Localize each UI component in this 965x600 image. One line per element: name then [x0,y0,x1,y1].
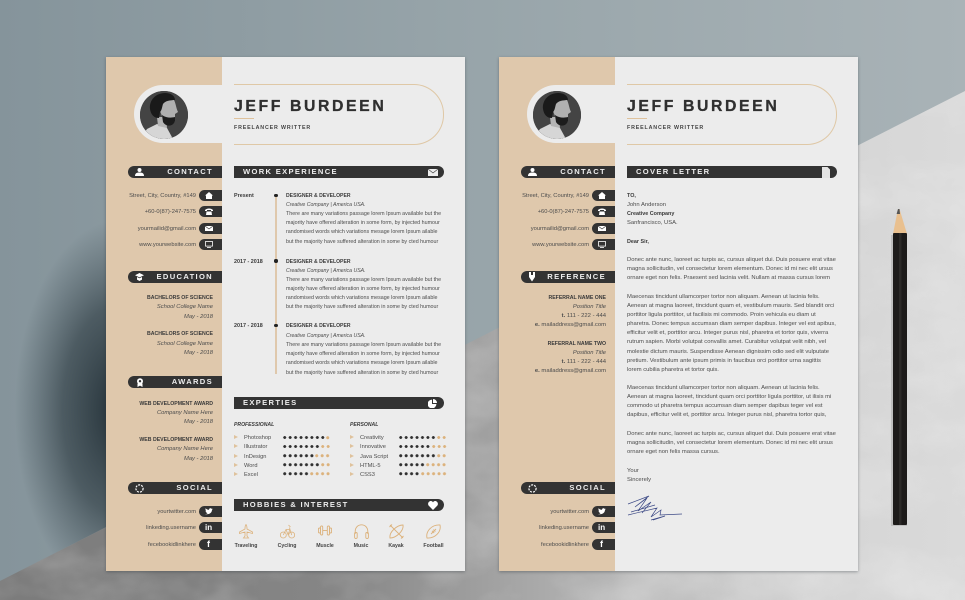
professional skills: InDesign [244,454,266,460]
section: social: yourtwitter.com [157,509,196,515]
heading: social: SOCIAL [569,483,606,492]
section: reference: Position Title [573,304,606,310]
job entry 3: majority have offered alteration in some form, by injected humour [286,351,440,357]
heading: awards: AWARDS [172,377,213,386]
icon: football [426,524,441,538]
portrait photo [140,91,188,139]
letter body text [627,193,836,483]
resume page: Jeff Burdeen [106,57,465,571]
label: kayak: Kayak [388,543,404,549]
letter body text: molestie dictum mauris. Suspendisse Aenean dignissim odio sed elit vulputate [627,349,829,355]
section: contact: +60-0(87)-247-7575 [145,209,196,215]
section: awards: May - 2018 [184,456,213,462]
letter body text: Sincerely [627,477,651,483]
icon: linkedin: in [205,522,212,532]
section: reference: e. mailaddress@gmail.com [535,368,606,374]
section: education: May - 2018 [184,350,213,356]
icon: facebook [592,538,615,550]
section: contact: +60-0(87)-247-7575 [538,209,589,215]
letter body text: Your [627,468,639,474]
job entry 2: majority have offered alteration in some form, by injected humour [286,286,440,292]
section: awards: Company Name Here [157,446,213,452]
icon: phone [592,206,615,217]
letter body text: Creative Company [627,211,674,217]
job entry 2: There are many variations passage lorem Ipsum available but the [286,277,441,283]
section: reference: Position Title [573,350,606,356]
icon: home [592,190,615,201]
letter body text: Maecenas tincidunt ullamcorper tortor non aliquam. Aenean ut lacinia felis. [627,294,820,300]
job title: FREELANCER WRITTER [234,125,311,131]
section: awards [128,376,222,462]
professional skills [234,422,330,478]
heading: contact: CONTACT [560,167,606,176]
section: contact: Street, City, Country, #149 [129,193,196,199]
icon: linkedin [592,522,615,532]
section: contact: yourmailid@gmail.com [531,226,589,232]
icon: home [199,190,222,201]
name: JEFF BURDEEN [627,98,779,114]
letter body text: John Anderson [627,202,666,208]
job entry 3: randomised words which variations mesage lorem Ipsum ailable [286,360,437,366]
timeline dot [274,324,278,327]
section: social: fecebookidlinkhere [541,542,589,548]
section: social: fecebookidlinkhere [148,542,196,548]
photo capsule [527,85,615,143]
name outline capsule [627,84,837,145]
icon: mail [199,222,222,234]
heading: hobbies and interest [234,499,444,511]
job entry 3 [234,323,441,376]
tan sidebar [106,57,222,571]
job entry 3: but the majority have suffered alteration in some by cted humour [286,370,438,376]
section: contact: yourmailid@gmail.com [138,226,196,232]
photo capsule [134,85,222,143]
job entry 2: randomised words which variations mesage lorem Ipsum ailable [286,295,437,301]
icon: facebook: f [600,538,603,548]
section: reference: t. 111 - 222 - 444 [562,313,606,319]
section: awards: WEB DEVELOPMENT AWARD [139,401,213,407]
tan sidebar [499,57,615,571]
job entry 1: There are many variations passage lorem Ipsum available but the [286,211,441,217]
job entry 3: There are many variations passage lorem Ipsum available but the [286,342,441,348]
icon: bicycle [280,524,295,538]
section: reference: t. 111 - 222 - 444 [562,359,606,365]
personal skills: HTML-5 [360,463,381,469]
section: experties [234,397,446,478]
letter body text: dapibus, efficitur velit et, porttitor arcu. Integer purus nisl, pharetra tortor quis, [627,412,826,418]
letter body text: Donec ante nunc, laoreet ac turpis ac, cursus aliquet dui. Duis posuere erat vitae [627,257,836,263]
icon: monitor [199,238,222,250]
heading: cover letter [627,166,837,178]
icon: phone [199,206,222,217]
section: awards: WEB DEVELOPMENT AWARD [139,437,213,443]
letter body text: TO, [627,193,636,199]
icon: twitter [199,506,222,516]
professional skills: Illustrator [244,444,267,450]
job entry 1: but the majority have suffered alteration in some by cted humour [286,239,438,245]
timeline dot [274,259,278,263]
heading: contact: CONTACT [167,167,213,176]
letter body text: magna sollicitudin, vel consectetur lorem elementum. Donec id mi nec elit ursus [627,440,833,446]
section: reference: REFERRAL NAME ONE [548,295,606,301]
icon: mail [592,222,615,234]
letter body text: lorem cubilia pharetra et tortor quis. [627,367,719,373]
name: JEFF BURDEEN [234,98,386,114]
section: contact: www.yourwebsite.com [532,242,589,248]
section: awards: Company Name Here [157,410,213,416]
section: education: BACHELORS OF SCIENCE [147,295,213,301]
section: reference [521,271,615,374]
job entry 1: DESIGNER & DEVELOPER [286,193,351,199]
letter body text: rutrum sapien. Morbi volutpat convallis amet. Curabitur volutpat velit nibh, vel [627,339,826,345]
job entry 3: Creative Company | America USA. [286,333,366,339]
letter body text: Maecenas tincidunt ullamcorper tortor non aliquam. Aenean ut lacinia felis. [627,385,820,391]
letter body text: pharetra. Donec tempus accumsan diam semper dapibus. Integer vel est apibus, [627,321,836,327]
letter body text: porttitor ligula porttitor, ut facilisis mi commodo. Proin vehicula eu diam ut [627,312,816,318]
job entry 2: 2017 - 2018 [234,259,263,265]
pencil body [893,233,907,525]
heading: social [521,482,615,494]
section: education: School College Name [157,304,213,310]
personal skills: Java Script [360,454,388,460]
job entry 3: DESIGNER & DEVELOPER [286,323,351,329]
heading: experties [234,397,444,409]
job entry 2: Creative Company | America USA. [286,268,366,274]
job title: FREELANCER WRITTER [627,125,704,131]
section: hobbies and interest [234,499,444,549]
personal skills [350,422,446,478]
pencil [891,209,907,526]
job entry 1: majority have offered alteration in some form, by injected humour [286,220,440,226]
label: traveling: Traveling [235,543,257,549]
section: social: linkeding.username [539,525,589,531]
section: reference: REFERRAL NAME TWO [548,341,606,347]
icon: plane [239,524,253,538]
icon: twitter [592,506,615,516]
job entry 1 [234,193,441,245]
letter body text: Dear Sir, [627,239,649,245]
heading: reference [521,271,615,283]
professional skills: Excel [244,472,258,478]
heading: awards [128,376,222,388]
icon: dumbbell [318,526,332,536]
section: education [128,271,222,356]
heading: cover letter: COVER LETTER [636,167,710,176]
personal skills: Creativity [360,435,384,441]
label: muscle: Muscle [316,543,334,549]
job entry 3: 2017 - 2018 [234,323,263,329]
pencil shadow [891,235,907,526]
section: contact [128,166,222,250]
section: work experience [234,166,444,376]
professional skills: Photoshop [244,435,271,441]
section: contact: www.yourwebsite.com [139,242,196,248]
name outline capsule [234,84,444,145]
section: contact: Street, City, Country, #149 [522,193,589,199]
heading: reference: REFERENCE [547,272,606,281]
letter body text: ornare eget non felis. Praesent sed lacinia velit. Nullam at massa cursus lorem [627,275,830,281]
letter body text: magna sollicitudin, vel consectetur lorem elementum. Donec id mi nec elit ursus [627,266,833,272]
heading: experties: EXPERTIES [243,398,298,407]
job entry 2: but the majority have suffered alteration in some by cted humour [286,304,438,310]
letter body text: efficitur velit et, porttitor arcu. Integer purus nisl, pharetra et tortor quis, viverra [627,330,828,336]
portrait photo [533,91,581,139]
icon: headphones [354,524,369,539]
heading: contact [521,166,615,178]
icon: kayak [389,524,404,539]
heading: hobbies and interest: HOBBIES & INTEREST [243,500,349,509]
job entry 1: Present [234,193,254,199]
personal skills: CSS3 [360,472,375,478]
heading: work experience: WORK EXPERIENCE [243,167,338,176]
heading: social: SOCIAL [176,483,213,492]
label: football: Football [423,543,444,549]
section: social: yourtwitter.com [550,509,589,515]
section: social [521,482,615,550]
timeline [275,194,277,374]
section: awards: May - 2018 [184,419,213,425]
letter body text: Donec ante nunc, laoreet ac turpis ac, cursus aliquet dui. Duis posuere erat vitae [627,431,836,437]
letter body text: Aenean at magna laoreet, tincidunt quam et, vestibulum mauris. Sed blandit orci [627,303,834,309]
heading: education [128,271,222,283]
job entry 2: DESIGNER & DEVELOPER [286,259,351,265]
signature [628,496,682,520]
label: cycling: Cycling [278,543,296,549]
heading: social [128,482,222,494]
cover letter page [499,57,858,571]
section: education: School College Name [157,341,213,347]
icon: monitor [592,238,615,250]
personal skills: PERSONAL [350,422,378,428]
letter body text: commodo ut pharetra tempus accumsan diam semper dapibus teger vel est [627,403,823,409]
heading: work experience [234,166,444,178]
section: education: May - 2018 [184,314,213,320]
letter body text: Aenean at magna laoreet, tincidunt quam orci porttitor ligula porttitor, ut ilisis mi [627,394,831,400]
section: contact [521,166,615,250]
professional skills: PROFESSIONAL [234,422,274,428]
letter body text: Sanfrancisco, USA. [627,220,678,226]
section: education: BACHELORS OF SCIENCE [147,331,213,337]
section: social [128,482,222,550]
job entry 1: Creative Company | America USA. [286,202,366,208]
icon: facebook: f [207,538,210,548]
heading: contact [128,166,222,178]
personal skills: Innovative [360,444,386,450]
job entry 2 [234,259,441,310]
label: music: Music [354,543,368,549]
letter body text: ornare eget non felis massa cursus. [627,449,720,455]
heading: education: EDUCATION [157,272,213,281]
professional skills: Word [244,463,258,469]
icon: facebook [199,538,222,550]
timeline dot [274,194,278,197]
pencil tip [893,209,907,234]
letter body text: pretium. Vestibulum ante ipsum primis in faucibus orci porttitor urna sagittis [627,358,821,364]
section: reference: e. mailaddress@gmail.com [535,322,606,328]
section: social: linkeding.username [146,525,196,531]
job entry 1: randomised words which variations mesage lorem Ipsum ailable [286,229,437,235]
icon: linkedin [199,522,222,532]
icon: linkedin: in [598,522,605,532]
